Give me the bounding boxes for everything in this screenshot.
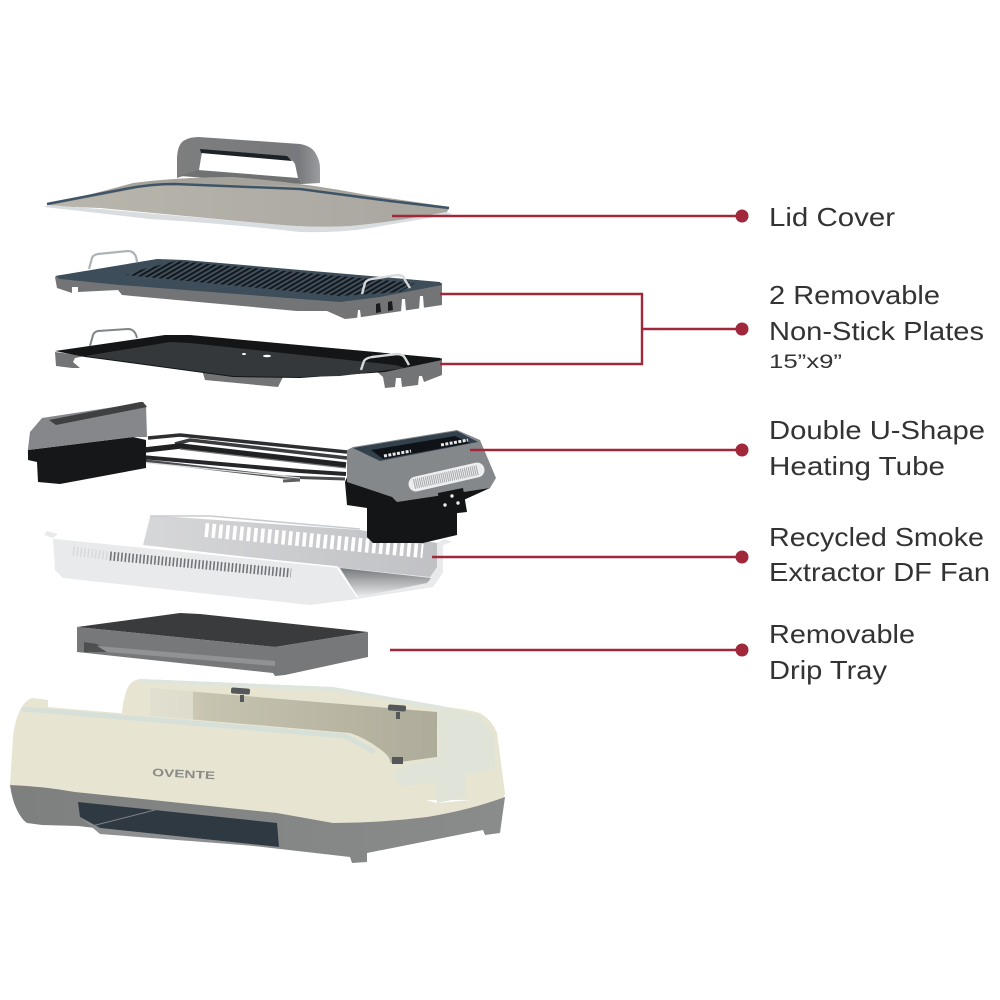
base cream front [10,698,505,823]
left bracket top strip [49,402,147,425]
leader: plates bracket [440,294,748,364]
griddle dark surface [55,335,442,378]
griddle front handle [361,354,409,370]
label: drip tray [769,619,915,685]
base screws [231,687,406,764]
grill slots [357,296,424,320]
lid glass panel [46,184,449,227]
base interior [150,688,437,763]
back wall vents [205,530,423,551]
label: smoke extractor [769,522,990,587]
griddle inner pan [85,342,405,377]
griddle right end [375,358,442,388]
left bracket upper [27,403,147,457]
base rim [140,681,447,709]
flat griddle plate illustration [55,329,442,388]
griddle holes [242,353,271,357]
lid blue rim [47,184,449,208]
base back wall [122,679,505,800]
label: removable plates: 15”x9” [769,352,842,373]
label: smoke extractor: Extractor DF Fan [769,557,990,587]
smoke extractor tray illustration [44,516,452,605]
griddle rear handle [90,329,137,346]
control box housing [347,430,496,502]
heating tube illustration [27,402,496,543]
griddle left tab [55,352,85,368]
grill front handle [362,275,410,294]
leader: lid cover [392,210,748,222]
label: removable plates: 2 Removable [769,280,940,310]
label: drip tray: Drip Tray [769,655,887,685]
power socket [438,488,467,515]
grill ridges [126,261,415,296]
tray lip [53,538,358,598]
label: removable plates [769,280,984,373]
drip tray notch [84,642,107,652]
leader: heating tube [470,444,748,456]
vent grille [416,470,477,484]
heating tubes [67,435,347,481]
lid top dome [46,177,450,215]
end opening [340,568,431,597]
drip tray top [77,613,368,647]
label: heating tube: Double U-Shape [769,415,985,445]
left bracket lower [28,437,146,484]
drip tray front [77,627,368,676]
tray back wall [143,516,437,577]
grill plate body [55,277,442,319]
display readouts [384,440,468,456]
tray body [44,531,452,605]
control box lower black [345,470,490,543]
base gray bottom [10,785,505,863]
base housing illustration [10,679,505,863]
label: lid cover: Lid Cover [769,202,895,232]
griddle centre tab [202,370,290,387]
label: removable plates: Non-Stick Plates [769,316,984,346]
leader: drip tray [390,644,748,656]
drip tray illustration [77,613,368,676]
lid handle [177,137,320,184]
label: smoke extractor: Recycled Smoke [769,522,984,552]
label: heating tube: Heating Tube [769,451,945,481]
control display [353,431,478,461]
grill plate illustration [55,251,442,320]
grill rear handle [89,251,137,269]
brand name: OVENTE [152,767,215,782]
lid cover illustration [44,137,452,232]
lid pale lower edge [44,205,452,232]
label: drip tray: Removable [769,619,915,649]
front wall vents [73,551,110,556]
base front rim [22,709,375,752]
leader: smoke extractor [432,550,748,564]
fan slot [78,802,279,847]
grill top surface [55,259,442,302]
base right recess [393,708,495,803]
label: heating tube [769,415,985,481]
